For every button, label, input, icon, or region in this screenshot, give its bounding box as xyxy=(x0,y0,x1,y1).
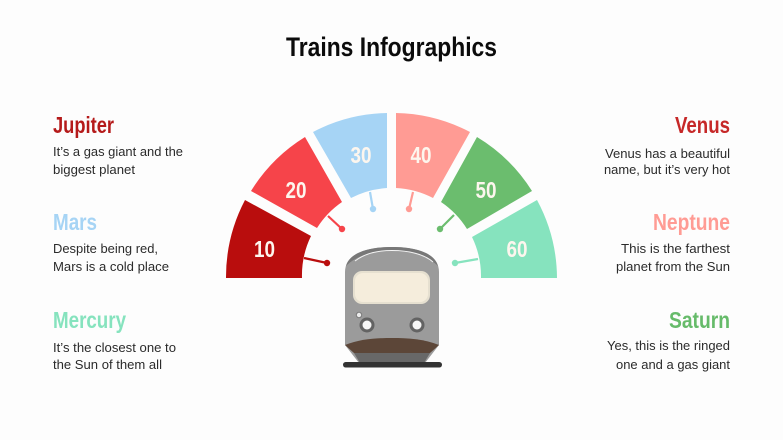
title: Trains Infographics xyxy=(286,32,497,62)
text block: Neptune: This is the farthest xyxy=(621,242,731,256)
text block: Mercury: Mercury xyxy=(53,307,126,333)
gauge segment 20: 20 xyxy=(286,177,306,203)
icon: train xyxy=(343,247,442,368)
gauge segment 30 xyxy=(313,113,387,212)
text block: Mercury xyxy=(53,307,176,372)
text block: Venus xyxy=(604,112,731,177)
gauge segment 10: 10 xyxy=(254,236,275,262)
gauge segment 60 xyxy=(452,200,557,278)
text block: Venus: name, but it’s very hot xyxy=(604,163,731,177)
gauge segment 30: 30 xyxy=(350,142,372,168)
text block: Jupiter: It’s a gas giant and the xyxy=(53,145,183,159)
text block: Neptune: Neptune xyxy=(653,209,730,235)
text block: Venus: Venus has a beautiful xyxy=(605,147,730,161)
text block: Saturn xyxy=(607,307,731,372)
text block: Mars: Despite being red, xyxy=(53,242,158,256)
gauge segment 50 xyxy=(437,137,532,232)
text block: Neptune: planet from the Sun xyxy=(616,260,730,274)
text block: Venus: Venus xyxy=(675,112,730,138)
text block: Mars: Mars is a cold place xyxy=(53,260,169,274)
gauge segment 10 xyxy=(226,200,330,278)
text block: Jupiter: biggest planet xyxy=(53,163,136,177)
gauge segment 40 xyxy=(396,113,470,212)
gauge segment 40: 40 xyxy=(410,142,432,168)
text block: Jupiter xyxy=(53,112,183,177)
text block: Mercury: the Sun of them all xyxy=(53,358,162,372)
text block: Mars: Mars xyxy=(53,209,97,235)
gauge chart xyxy=(226,113,557,278)
text block: Jupiter: Jupiter xyxy=(53,112,114,138)
text block: Saturn: Yes, this is the ringed xyxy=(607,339,730,353)
text block: Mercury: It’s the closest one to xyxy=(53,341,176,355)
text block: Saturn: one and a gas giant xyxy=(616,358,731,372)
text block: Mars xyxy=(53,209,169,274)
text block: Saturn: Saturn xyxy=(669,307,730,333)
text block: Neptune xyxy=(616,209,731,274)
gauge segment 20 xyxy=(251,137,345,232)
gauge segment 50: 50 xyxy=(476,177,496,203)
gauge segment 60: 60 xyxy=(506,236,528,262)
